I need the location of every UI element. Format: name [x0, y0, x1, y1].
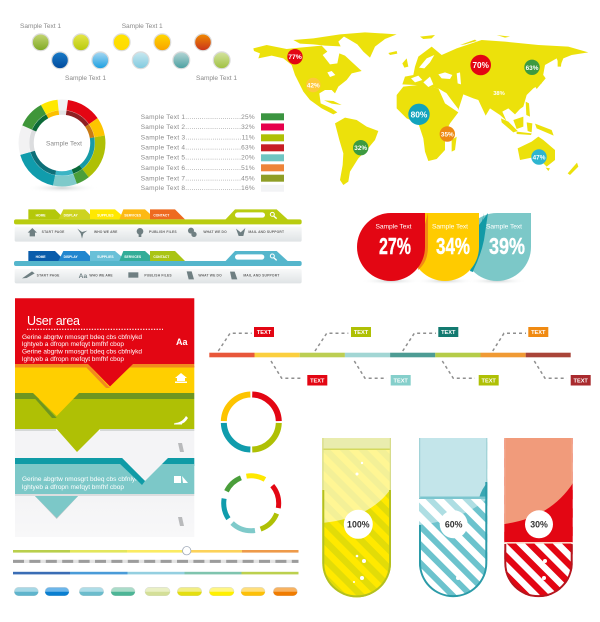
- timeline connectors: [218, 333, 567, 378]
- nav bar strip and search: [14, 209, 302, 224]
- nav tabs: DISPLAY: [64, 255, 79, 259]
- teardrop: 27%: [357, 213, 428, 281]
- nav tabs: SUPPLIES: [97, 255, 114, 259]
- donut center label: Sample Text: [46, 140, 82, 148]
- donut outer ring segments: [24, 105, 100, 181]
- map bubbles: 42%: [307, 82, 320, 90]
- user area body text: Gerine abgrtw nmosgrt bdeq cbs cbfnlykd: [22, 334, 142, 341]
- test tube: 100%: 100%: [347, 520, 370, 530]
- legend text rows: Sample Text 8...........................16%: [141, 185, 255, 192]
- nav tabs: HOME: [36, 213, 46, 217]
- legend text rows: Sample Text 2...........................32%: [141, 124, 255, 131]
- ring: four segments: [224, 394, 279, 450]
- user area body text: Gerine abgrtw nmosgrt bdeq cbs cbfnlykd: [22, 348, 142, 356]
- seas: [411, 55, 461, 111]
- teal section: lghtyeb a dfropn mefqyt bmfhf cbop: [22, 484, 124, 491]
- yellow section: [15, 366, 194, 418]
- map bubbles: 80%: [411, 110, 428, 120]
- user area body text: lghtyeb a dfropn mefqyt bmfhf cbop: [22, 341, 124, 348]
- nav tabs: [28, 209, 185, 219]
- glossy dots: [32, 34, 230, 69]
- dot labels: Sample Text 1: [65, 75, 106, 82]
- user area heading: User area: [27, 314, 80, 328]
- legend text rows: Sample Text 7...........................45%: [141, 175, 255, 182]
- user area body text: [22, 334, 142, 363]
- donut chart: [24, 105, 100, 193]
- nav menu panel: PUBLISH FILES: [144, 273, 172, 277]
- legend text rows: Sample Text 4...........................63%: [141, 145, 255, 152]
- navigation bar: green: [14, 209, 302, 242]
- map bubbles: [287, 49, 547, 165]
- teal section: Gerine abgrtw nmosgrt bdeq cbs cbfnlykd: [22, 476, 142, 483]
- map bubbles: 35%: [441, 132, 454, 138]
- red section: [15, 298, 194, 388]
- timeline labels: TEXT: [441, 330, 456, 336]
- timeline labels: TEXT: [482, 378, 496, 384]
- teardrop: 39%: [463, 213, 531, 281]
- legend text rows: Sample Text 6...........................51%: [141, 165, 255, 172]
- slider: blue to green: [13, 572, 298, 574]
- nav menu panel: PUBLISH FILES: [149, 230, 177, 234]
- map bubbles: 47%: [533, 154, 546, 162]
- nav tabs: SUPPLIES: [97, 213, 114, 217]
- nav tabs: SERVICES: [124, 255, 142, 259]
- test tube: 30%: 30%: [530, 520, 548, 530]
- timeline labels: TEXT: [574, 378, 588, 384]
- dot labels: Sample Text 1: [122, 23, 163, 30]
- nav menu panel: [15, 227, 302, 242]
- percentage legend list: [141, 113, 284, 192]
- test tube: 100%: [322, 438, 392, 598]
- teardrop: 34%: 34%: [436, 233, 470, 259]
- nav menu panel: [15, 269, 302, 283]
- dot labels: Sample Text 1: [20, 23, 61, 30]
- nav tabs: [28, 251, 185, 261]
- timeline labels: TEXT: [531, 330, 546, 336]
- nav tabs: SERVICES: [124, 213, 142, 217]
- nav tabs: CONTACT: [153, 255, 169, 259]
- legend swatches: [261, 113, 284, 192]
- legend text rows: Sample Text 3...........................11%: [141, 135, 255, 142]
- lime section: [15, 393, 194, 452]
- test tube: 60%: [419, 438, 488, 598]
- nav menu panel: WHAT WE DO: [198, 273, 222, 277]
- europe asia africa oceania: [397, 35, 588, 175]
- teardrop: 39%: Sample Text: [486, 224, 522, 230]
- nav menu panel: WHAT WE DO: [203, 230, 227, 234]
- map bubbles: 77%: [288, 54, 302, 61]
- timeline labels: TEXT: [257, 330, 272, 336]
- nav menu panel: START PAGE: [42, 230, 65, 234]
- americas lakes: [327, 71, 335, 77]
- ring: six segments: [224, 476, 279, 531]
- map bubbles: 38%: [493, 91, 505, 97]
- nav menu panel: WHO WE ARE: [89, 273, 113, 277]
- nav tabs: DISPLAY: [64, 213, 79, 217]
- test tube: 30%: [504, 438, 573, 598]
- legend text rows: Sample Text 1...........................25%: [141, 114, 255, 121]
- dot labels: Sample Text 1: [196, 75, 237, 82]
- pill buttons: [14, 587, 297, 596]
- timeline labels: TEXT: [394, 378, 408, 384]
- teardrop: 34%: [411, 213, 479, 281]
- world map: [253, 32, 588, 185]
- white section with notch: [15, 431, 194, 485]
- nav menu panel: MAIL AND SUPPORT: [243, 273, 279, 277]
- nav bar strip and search: [14, 251, 302, 266]
- timeline labels: TEXT: [354, 330, 369, 336]
- side icons: [174, 337, 188, 526]
- user area stacked panel: [15, 298, 194, 537]
- side icons: Aa: [176, 337, 188, 347]
- slider: green to orange: [13, 546, 298, 555]
- teardrop: 34%: Sample Text: [432, 224, 468, 230]
- timeline bar: [209, 353, 571, 357]
- timeline labels: TEXT: [310, 378, 325, 384]
- nav tabs: CONTACT: [153, 213, 169, 217]
- slider knob: [182, 546, 191, 555]
- map bubbles: 63%: [526, 65, 539, 72]
- teardrop: 27%: 27%: [379, 233, 411, 259]
- colored dots row with labels: [20, 23, 237, 82]
- navigation bar: blue: [14, 251, 302, 283]
- donut inner ring segments: [32, 112, 92, 174]
- teardrop: 27%: Sample Text: [376, 224, 412, 230]
- bottom gray section: [15, 496, 194, 537]
- americas and greenland: [253, 32, 397, 185]
- nav menu panel: START PAGE: [37, 273, 60, 277]
- nav menu panel: MAIL AND SUPPORT: [248, 230, 284, 234]
- teardrop percentage badges: [357, 213, 531, 284]
- test tube: 60%: 60%: [445, 520, 463, 530]
- nav menu panel: Aa: [79, 273, 87, 280]
- teardrop: 39%: 39%: [489, 233, 525, 259]
- timeline labels: [254, 327, 591, 386]
- user area body text: lghtyeb a dfropn mefqyt bmfhf cbop: [22, 356, 124, 363]
- nav tabs: HOME: [36, 255, 46, 259]
- nav menu panel: WHO WE ARE: [94, 230, 118, 234]
- dot labels: [20, 23, 237, 82]
- legend text rows: Sample Text 5...........................20%: [141, 155, 255, 162]
- timeline: [209, 327, 591, 386]
- dashed gray progress bar: [13, 560, 298, 563]
- map bubbles: 32%: [354, 145, 367, 152]
- map bubbles: 70%: [473, 61, 490, 70]
- legend text rows: [141, 114, 255, 192]
- teal section: [15, 458, 194, 519]
